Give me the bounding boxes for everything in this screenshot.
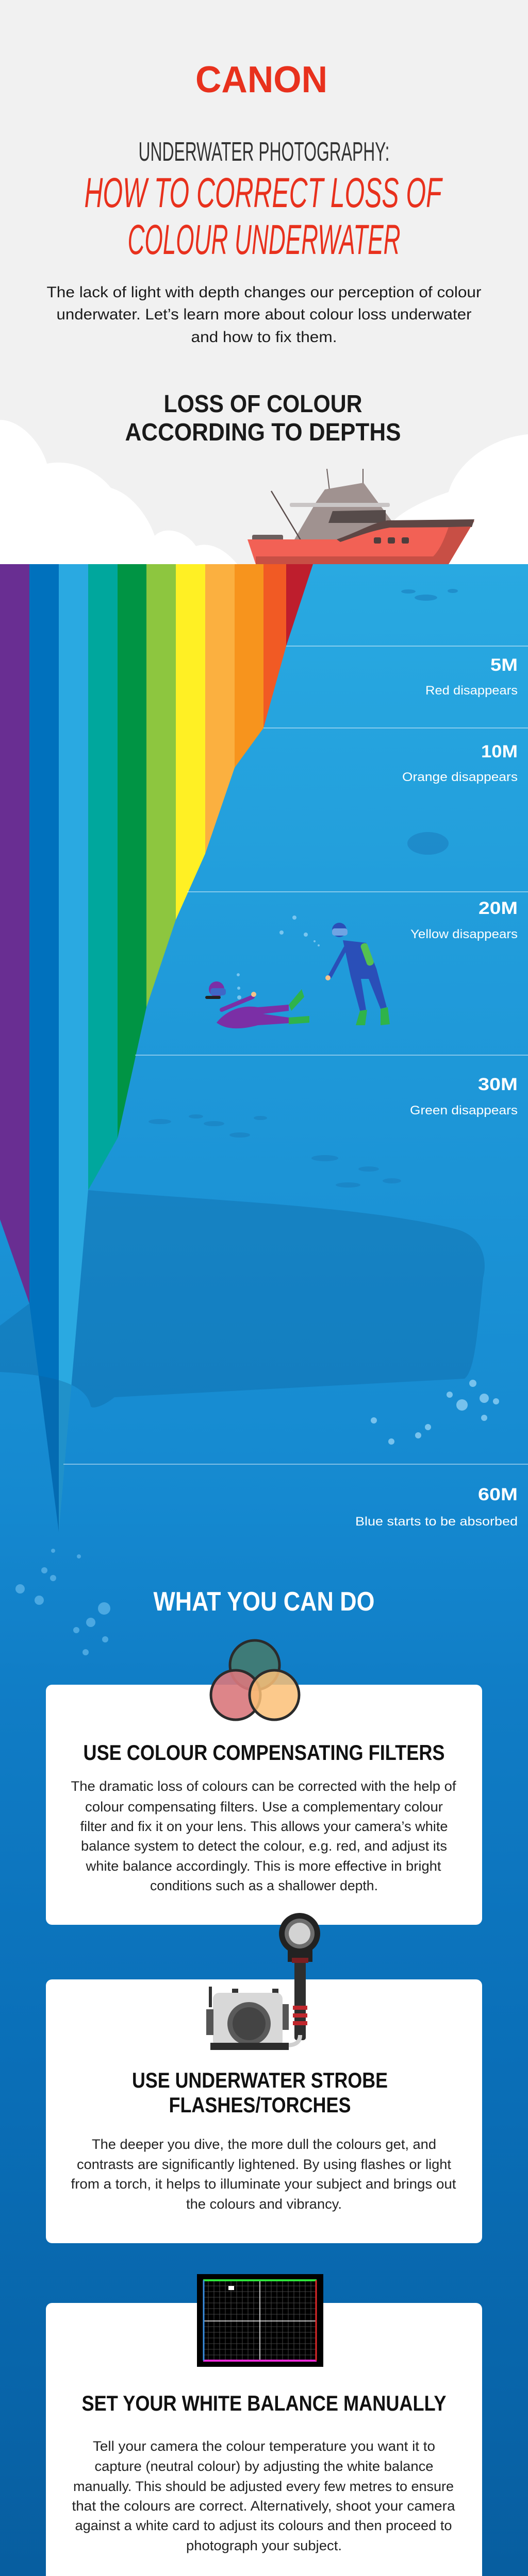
heading: what you can do: WHAT YOU CAN DO (154, 1587, 374, 1617)
depth label: 60M (355, 1485, 518, 1529)
panel: white balance: manually. This should be adjusted every few metres to ensure (73, 2479, 454, 2494)
depth label: 60M: 60M (478, 1485, 518, 1504)
intro text (46, 284, 482, 346)
panel: white balance: against a white card to adjust its colours and then proceed to (75, 2518, 452, 2533)
depth label: 5M: Red disappears (425, 684, 518, 698)
icon: strobe and camera housing (206, 1913, 320, 2050)
depth label: 5M (425, 655, 518, 698)
bubbles (237, 916, 499, 1445)
intro text: The lack of light with depth changes our perception of colour (46, 284, 482, 301)
panel: white balance: SET YOUR WHITE BALANCE MANUALLY (81, 2391, 447, 2415)
depth label: 30M (410, 1075, 518, 1117)
panel: underwater strobe flashes: FLASHES/TORCHES (169, 2093, 351, 2117)
panel: colour compensating filters: balance system to detect the colour, e.g. red, and adjust its (81, 1838, 447, 1854)
depth label: 5M: 5M (490, 655, 518, 675)
heading: loss of colour according to depths: LOSS OF COLOUR (164, 391, 362, 418)
panel: colour compensating filters: filter and fix it on your lens. This allows your camera’s white (80, 1819, 448, 1834)
depth label: 20M: Yellow disappears (410, 927, 518, 941)
panel: white balance: that the colours are correct. Alternatively, shoot your camera (72, 2498, 456, 2514)
clouds (0, 420, 528, 564)
panel: underwater strobe flashes: the colours and vibrancy. (186, 2196, 342, 2212)
depth label: 30M: 30M (478, 1075, 518, 1094)
panel: colour compensating filters: The dramatic loss of colours can be corrected with the help of (71, 1778, 456, 1794)
panel: colour compensating filters: USE COLOUR COMPENSATING FILTERS (84, 1740, 444, 1765)
icon: colour filters (211, 1640, 299, 1720)
diver: blue (325, 923, 390, 1025)
panel: white balance: photograph your subject. (186, 2538, 342, 2553)
panel: colour compensating filters: conditions such as a shallower depth. (150, 1878, 378, 1893)
depth label: 20M: 20M (478, 899, 518, 918)
panel: colour compensating filters (46, 1640, 482, 1925)
heading: loss of colour according to depths (125, 391, 401, 446)
diver: purple (205, 981, 309, 1028)
whale silhouette (0, 1190, 485, 1532)
depth label: 10M: Orange disappears (402, 770, 518, 784)
logo: CANON: CANON (195, 59, 327, 100)
panel: underwater strobe flashes: contrasts are significantly lightened. By using flashes or light (77, 2157, 451, 2172)
depth label: 20M (410, 899, 518, 941)
icon: white balance grid (197, 2274, 323, 2367)
panel: underwater strobe flashes: The deeper you dive, the more dull the colours get, and (92, 2137, 436, 2152)
panel: underwater strobe flashes: USE UNDERWATER STROBE (132, 2068, 388, 2092)
colour spectrum stripes (0, 564, 313, 1532)
depth label: 60M: Blue starts to be absorbed (355, 1515, 518, 1529)
panel: white balance (46, 2274, 482, 2576)
depth lines (63, 646, 528, 1464)
depth label: 10M (402, 742, 518, 784)
depth label: 10M: 10M (481, 742, 518, 761)
panel: underwater strobe flashes: from a torch, it helps to illuminate your subject and brings out (71, 2176, 456, 2192)
fish silhouettes (148, 589, 458, 1188)
heading: loss of colour according to depths: ACCORDING TO DEPTHS (125, 419, 401, 446)
panel: colour compensating filters: colour compensating filters. Use a complementary colour (85, 1799, 443, 1815)
intro text: and how to fix them. (191, 329, 337, 346)
boat (248, 469, 474, 564)
panel: colour compensating filters: white balance accordingly. This is more effective in bright (85, 1858, 441, 1874)
depth label: 30M: Green disappears (410, 1104, 518, 1117)
panel: white balance: capture (neutral colour) by adjusting the white balance (95, 2459, 434, 2474)
title (85, 137, 443, 263)
panel: underwater strobe flashes (46, 1913, 482, 2243)
intro text: underwater. Let’s learn more about colour loss underwater (57, 306, 472, 323)
panel: white balance: Tell your camera the colour temperature you want it to (93, 2438, 435, 2454)
